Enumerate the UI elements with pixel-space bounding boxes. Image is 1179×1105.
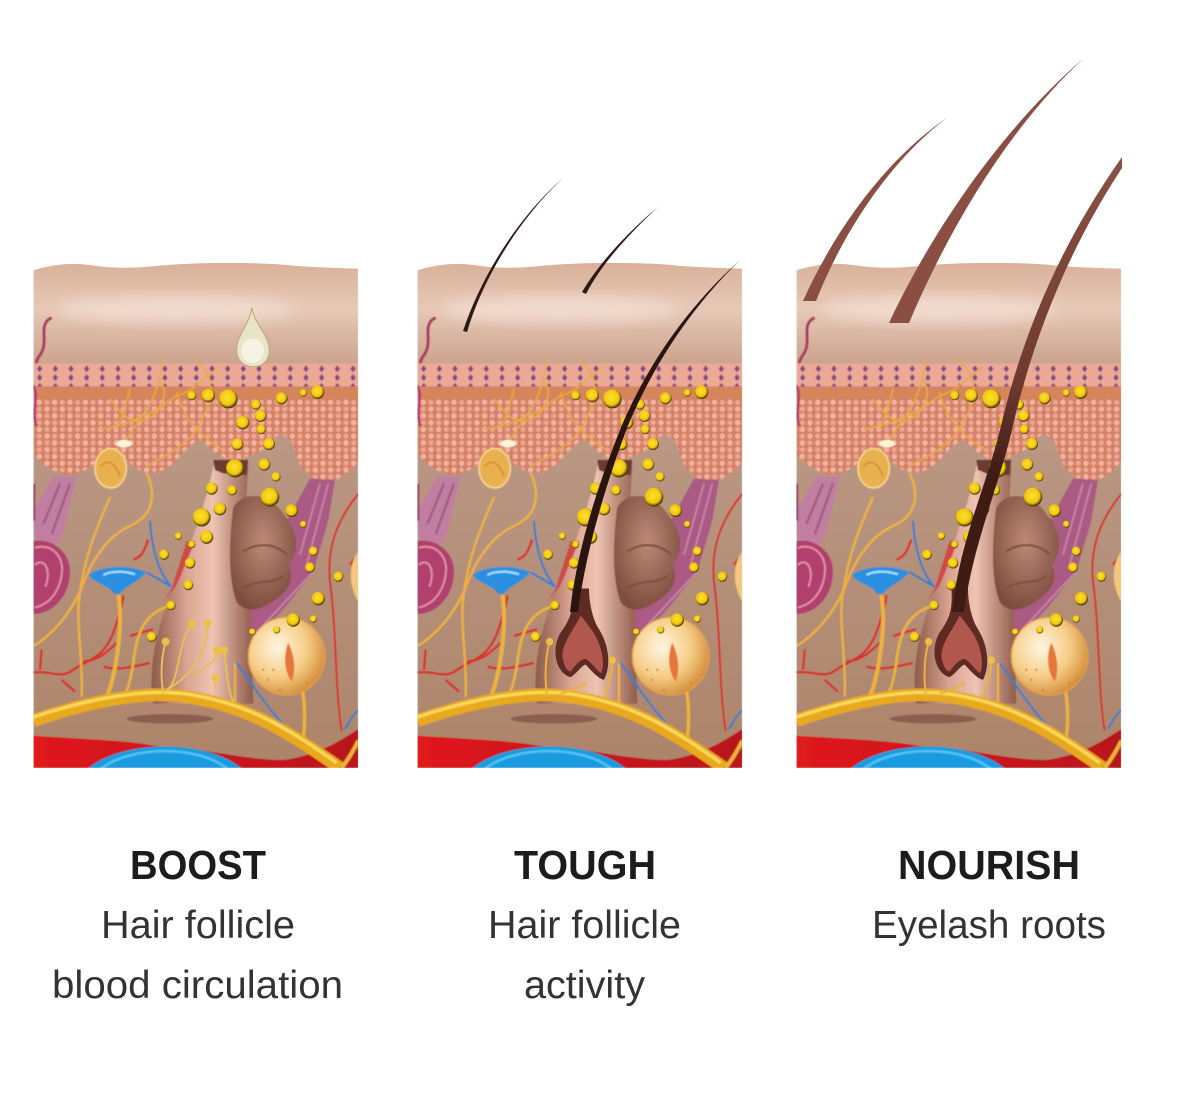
panel: boost	[33, 260, 358, 771]
caption: boost	[52, 842, 343, 1007]
description: Eyelash roots	[872, 904, 1106, 947]
caption: nourish	[872, 842, 1106, 947]
heading: BOOST	[130, 842, 266, 888]
long hair	[570, 260, 740, 612]
yellow nutrient dots	[531, 385, 727, 642]
nerve stalks on follicle	[162, 619, 233, 702]
thick hair	[803, 117, 948, 301]
hair bulb	[934, 588, 987, 680]
fine hair	[463, 178, 563, 332]
yellow nutrient dots	[147, 385, 343, 642]
yellow nutrient dots	[910, 385, 1106, 642]
heading: TOUGH	[514, 842, 656, 888]
description: blood circulation	[52, 964, 343, 1007]
panel: nourish	[796, 58, 1122, 771]
description: Hair follicle	[488, 904, 681, 947]
description: Hair follicle	[101, 904, 295, 947]
description: activity	[524, 964, 645, 1007]
description	[488, 904, 681, 1007]
thick hair	[889, 58, 1084, 323]
long thick hair	[952, 157, 1122, 612]
nerve stalks	[546, 638, 616, 697]
description	[52, 904, 343, 1007]
caption: tough	[488, 842, 681, 1007]
heading: NOURISH	[898, 842, 1080, 888]
panel: tough	[417, 178, 742, 771]
nerve stalks	[925, 638, 995, 697]
hair bulb	[555, 588, 608, 680]
fine hair	[582, 207, 658, 294]
icon: oil droplet	[237, 308, 269, 367]
